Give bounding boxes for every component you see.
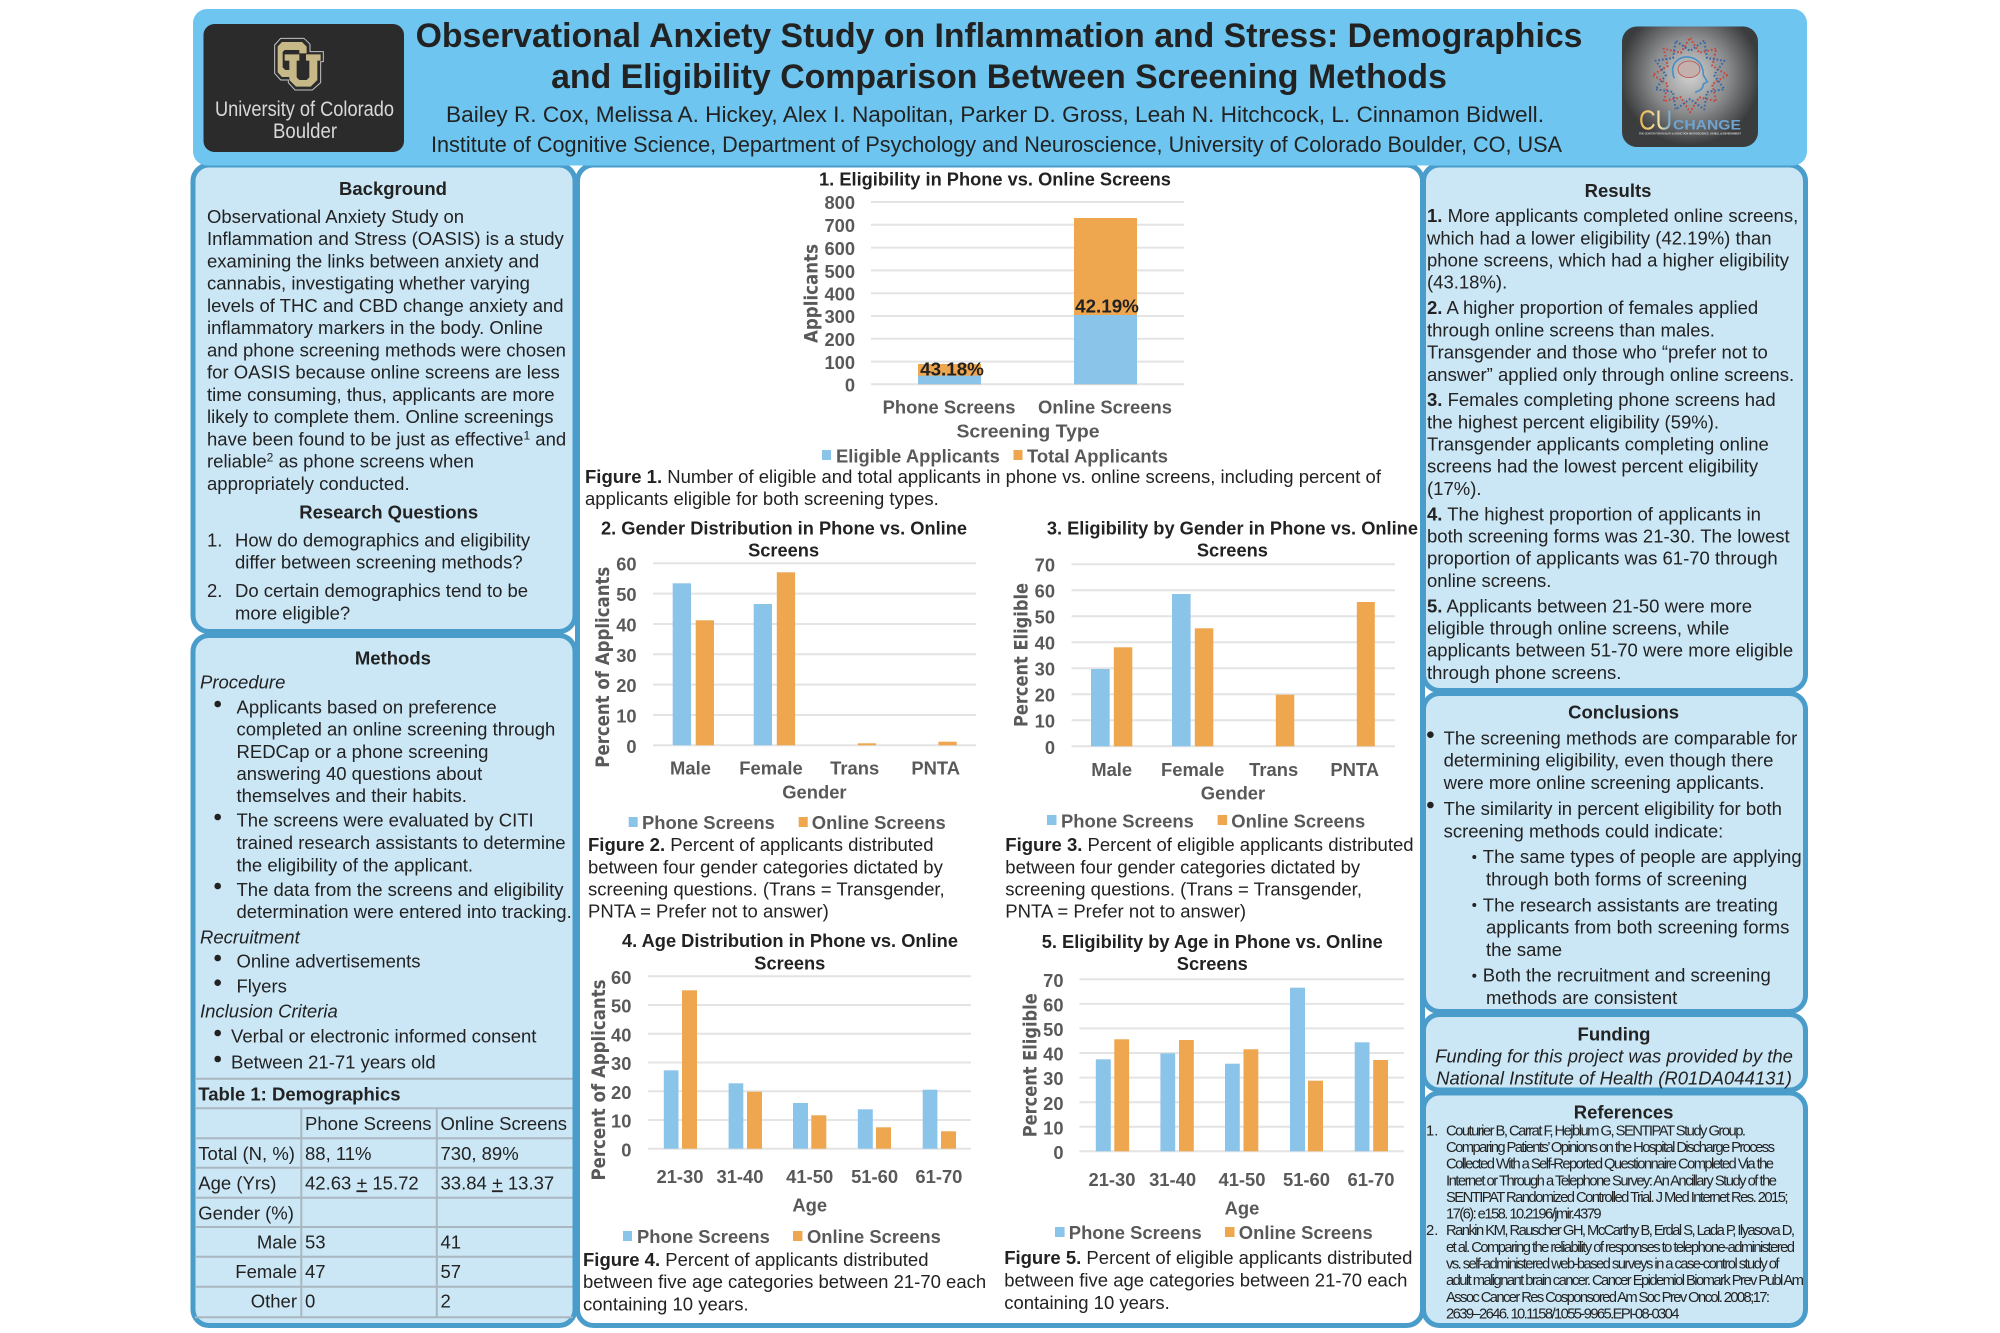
- table: demographics: 41: [440, 1232, 461, 1253]
- chart: figure 1 eligibility stacked bars: 600: [824, 238, 855, 259]
- text block: results: A higher proportion of females applied: [1442, 297, 1758, 318]
- text block: background: reliable: [207, 451, 474, 472]
- chart: figure 3 eligibility by gender: 40: [1035, 632, 1055, 654]
- chart: figure 3 eligibility by gender: 70: [1035, 554, 1055, 576]
- text block: results: (43.18%).: [1427, 272, 1507, 293]
- chart: figure 1 eligibility stacked bars: 400: [824, 284, 855, 304]
- chart: figure 1 eligibility stacked bars: Eligible Applicants: [836, 446, 1000, 466]
- logo: University of Colorado Boulder: University of Colorado: [215, 97, 394, 121]
- chart: figure 1 eligibility stacked bars: 42.19%: [1075, 296, 1139, 316]
- chart: figure 3 eligibility by gender: 60: [1035, 580, 1055, 602]
- table: demographics: Total (N, %): [198, 1143, 295, 1164]
- text block: results: Transgender applicants completing online: [1427, 433, 1769, 454]
- table: demographics: Phone Screens: [305, 1113, 432, 1134]
- chart: figure 1 eligibility stacked bars: 700: [824, 215, 855, 236]
- table: demographics: Other: [251, 1291, 297, 1312]
- list: references: Rankin KM, Rauscher GH, McCarthy B, Erdal S, Lada P, Ilyasova D,: [1446, 1223, 1795, 1239]
- caption: figure 5: between five age categories between 21-70 each: [1004, 1270, 1407, 1291]
- list: references: 1.: [1426, 1123, 1438, 1139]
- list: conclusions: The screening methods are comparable for: [1444, 727, 1797, 748]
- chart: figure 5 eligibility by age: 10: [1043, 1118, 1064, 1138]
- list: conclusions: applicants from both screening forms: [1486, 917, 1789, 938]
- logo: CU Change: THE CENTER FOR HEALTH & ADDICTION NEUROSCIENCE, GENES, & ENVIRONMENT: [1639, 132, 1741, 136]
- text block: results: Applicants between 21-50 were more: [1442, 595, 1752, 616]
- chart: figure 3 eligibility by gender: 50: [1035, 606, 1055, 628]
- caption: figure 3: between four gender categories dictated by: [1005, 856, 1361, 877]
- table: demographics: 88, 11%: [305, 1143, 372, 1164]
- text block: results: proportion of applicants was 61-70 through: [1427, 548, 1778, 569]
- list: references: 2639–2646. 10.1158/1055-9965.EPI-08-0304: [1446, 1306, 1680, 1322]
- chart: figure 2 gender distribution: Gender: [782, 782, 847, 802]
- chart: figure 4 age distribution: 4. Age Distribution in Phone vs. Online: [622, 930, 958, 951]
- heading: funding: Funding: [1578, 1024, 1650, 1045]
- chart: figure 1 eligibility stacked bars: Total Applicants: [1027, 446, 1168, 466]
- text block: background: levels of THC and CBD change anxiety and: [207, 295, 564, 316]
- list: references: Comparing Patients’ Opinions on the Hospital Discharge Process: [1446, 1140, 1775, 1156]
- list: research questions: 1.: [207, 529, 222, 550]
- list: inclusion criteria: [214, 1026, 536, 1072]
- list: research questions: more eligible?: [235, 602, 350, 623]
- chart: figure 5 eligibility by age: 5. Eligibility by Age in Phone vs. Online: [1042, 931, 1383, 952]
- text block: results: Females completing phone screens had: [1442, 389, 1776, 410]
- chart: figure 1 eligibility stacked bars: 300: [824, 306, 855, 327]
- table: demographics: 42.63 + 15.72: [305, 1172, 419, 1193]
- text block: results: The highest proportion of applicants in: [1442, 503, 1761, 524]
- logo: CU Change: CHANGE: [1673, 116, 1741, 132]
- list: procedure: completed an online screening through: [236, 719, 555, 740]
- list: procedure: the eligibility of the applicant.: [236, 855, 473, 876]
- chart: figure 3 eligibility by gender: 3. Eligibility by Gender in Phone vs. Online: [1047, 518, 1418, 538]
- table: demographics: 0: [305, 1291, 315, 1312]
- list: conclusions: The same types of people are applying: [1483, 846, 1802, 867]
- chart: figure 4 age distribution: 41-50: [786, 1166, 833, 1187]
- heading: methods: Methods: [355, 648, 431, 668]
- caption: figure 4: between five age categories between 21-70 each: [583, 1271, 986, 1292]
- heading: research questions: Research Questions: [299, 502, 478, 522]
- chart: figure 2 gender distribution: 0: [626, 736, 637, 757]
- text block: results: (17%).: [1427, 478, 1482, 499]
- chart: figure 3 eligibility by gender: Male: [1091, 759, 1132, 780]
- list: procedure: Applicants based on preference: [236, 696, 497, 717]
- chart: figure 1 eligibility stacked bars: Online Screens: [1038, 396, 1172, 418]
- caption: figure 4: Percent of applicants distributed: [660, 1249, 929, 1270]
- list: references: [1426, 1123, 1804, 1322]
- chart: figure 3 eligibility by gender: 0: [1045, 737, 1055, 758]
- chart: figure 2 gender distribution: 60: [616, 554, 637, 574]
- title: Observational Anxiety Study on Inflammation and Stress: Demographics: [416, 17, 1582, 55]
- chart: figure 4 age distribution: Phone Screens: [637, 1226, 770, 1247]
- text block: background: 1: [523, 428, 530, 442]
- text block: results: answer” applied only through online screens.: [1427, 364, 1794, 385]
- list: references: Collected With a Self-Reported Questionnaire Completed Via the: [1446, 1157, 1774, 1173]
- panel: methods and demographics table: [193, 636, 575, 1326]
- table: demographics: Table 1: Demographics: [198, 1084, 400, 1105]
- heading: conclusions: Conclusions: [1568, 702, 1679, 723]
- list: conclusions: were more online screening applicants.: [1443, 772, 1764, 793]
- table: demographics: Age (Yrs): [198, 1172, 276, 1193]
- text block: results: which had a lower eligibility (42.19%) than: [1426, 227, 1772, 248]
- text block: background: and: [530, 428, 566, 450]
- chart: figure 4 age distribution: Percent of Applicants: [588, 980, 610, 1180]
- chart: figure 2 gender distribution: PNTA: [911, 758, 960, 778]
- chart: figure 5 eligibility by age: 20: [1043, 1093, 1064, 1114]
- chart: figure 3 eligibility by gender: Female: [1161, 759, 1224, 780]
- list: procedure: [214, 696, 572, 922]
- list: conclusions: determining eligibility, even though there: [1444, 750, 1773, 771]
- caption: figure 3: Figure 3.: [1005, 834, 1082, 855]
- table: demographics: Online Screens: [440, 1113, 567, 1134]
- chart: figure 1 eligibility stacked bars: 43.18%: [920, 358, 984, 380]
- caption: figure 3: screening questions. (Trans = Transgender,: [1005, 879, 1362, 900]
- panel: conclusions: [1424, 694, 1807, 1012]
- text block: results: eligible through online screens, while: [1427, 618, 1729, 639]
- panel: results: [1424, 165, 1806, 690]
- list: references: SENTIPAT Randomized Controlled Trial. J Med Internet Res. 2015;: [1446, 1190, 1788, 1206]
- chart: figure 4 age distribution: 40: [611, 1024, 631, 1046]
- list: procedure: trained research assistants to determine: [236, 832, 566, 853]
- list: references: adult malignant brain cancer. Cancer Epidemiol Biomark Prev Publ Am: [1446, 1273, 1804, 1289]
- text block: results: screens had the lowest percent eligibility: [1427, 456, 1759, 477]
- list: recruitment: [214, 951, 421, 996]
- text block: background: cannabis, investigating whether varying: [207, 273, 530, 294]
- chart: figure 4 age distribution: Screens: [754, 952, 825, 974]
- chart: figure 2 gender distribution: 10: [616, 706, 637, 726]
- text block: background: have been found to be just as effective: [207, 428, 566, 450]
- chart: figure 2 gender distribution: 2. Gender Distribution in Phone vs. Online: [601, 518, 967, 538]
- chart: figure 3 eligibility by gender: 30: [1035, 658, 1055, 680]
- text block: results: through online screens than males.: [1427, 319, 1715, 340]
- text block: results: through phone screens.: [1427, 662, 1621, 683]
- text block: background: as phone screens when: [273, 451, 474, 472]
- caption: figure 4: Figure 4.: [583, 1249, 660, 1270]
- chart: figure 4 age distribution: Online Screens: [807, 1226, 941, 1247]
- chart: figure 4 age distribution: 50: [611, 996, 631, 1016]
- text block: results: Transgender and those who “prefer not to: [1427, 342, 1768, 363]
- chart: figure 4 age distribution: 20: [611, 1082, 631, 1103]
- table: demographics: 53: [305, 1232, 326, 1253]
- list: conclusions: screening methods could indicate:: [1444, 820, 1723, 841]
- list: recruitment: Flyers: [236, 975, 287, 996]
- chart: figure 1 eligibility stacked bars: 500: [824, 261, 855, 282]
- caption: figure 5: Figure 5.: [1004, 1247, 1081, 1268]
- chart: figure 5 eligibility by age: 50: [1043, 1019, 1064, 1040]
- chart: figure 5 eligibility by age: Screens: [1177, 953, 1248, 974]
- text block: results: 2.: [1427, 297, 1442, 318]
- chart: figure 5 eligibility by age: 30: [1043, 1068, 1064, 1089]
- table: demographics: 730, 89%: [440, 1143, 519, 1164]
- table: demographics: 33.84 + 13.37: [440, 1172, 554, 1193]
- chart: figure 4 age distribution: Age: [792, 1194, 827, 1216]
- authors: Bailey R. Cox, Melissa A. Hickey, Alex I. Napolitan, Parker D. Gross, Leah N. Hitchcock, L. Cinnamon Bidwell.: [446, 102, 1544, 127]
- chart: figure 1 eligibility stacked bars: 200: [824, 329, 855, 350]
- chart: figure 4 age distribution: 51-60: [851, 1166, 898, 1187]
- list: references: Couturier B, Carrat F, Hejblum G, SENTIPAT Study Group.: [1446, 1123, 1746, 1139]
- chart: figure 5 eligibility by age: [1020, 931, 1404, 1243]
- subheading: inclusion criteria: Inclusion Criteria: [200, 1001, 338, 1022]
- list: procedure: determination were entered into tracking.: [236, 901, 572, 922]
- caption: figure 2: Figure 2.: [588, 834, 665, 855]
- list: references: et al. Comparing the reliability of responses to telephone-administered: [1446, 1240, 1795, 1256]
- caption: figure 1: Figure 1.: [585, 466, 662, 487]
- caption: figure 2: between four gender categories dictated by: [588, 856, 944, 877]
- caption: figure 2: Percent of applicants distributed: [665, 834, 934, 855]
- chart: figure 3 eligibility by gender: Trans: [1249, 759, 1298, 780]
- chart: figure 5 eligibility by age: Age: [1225, 1198, 1259, 1218]
- list: research questions: 2.: [207, 580, 222, 601]
- header banner: [193, 9, 1807, 166]
- chart: figure 4 age distribution: 60: [611, 967, 631, 988]
- caption: figure 1: applicants eligible for both screening types.: [585, 488, 939, 509]
- chart: figure 3 eligibility by gender: PNTA: [1330, 759, 1379, 780]
- list: references: 17(6): e158. 10.2196/jmir.4379: [1446, 1207, 1602, 1223]
- chart: figure 5 eligibility by age: Online Screens: [1239, 1222, 1373, 1243]
- chart: figure 2 gender distribution: [592, 518, 976, 833]
- chart: figure 2 gender distribution: 40: [616, 614, 637, 636]
- list: research questions: Do certain demographics tend to be: [235, 580, 528, 601]
- chart: figure 5 eligibility by age: 70: [1043, 970, 1064, 991]
- list: references: Internet or Through a Telephone Survey: An Ancillary Study of the: [1446, 1173, 1777, 1189]
- chart: figure 5 eligibility by age: 51-60: [1283, 1169, 1330, 1190]
- chart: figure 2 gender distribution: Female: [739, 758, 803, 778]
- chart: figure 2 gender distribution: Screens: [748, 540, 819, 560]
- subheading: procedure: Procedure: [200, 672, 285, 693]
- text block: results: 1.: [1427, 205, 1442, 226]
- chart: figure 3 eligibility by gender: 10: [1035, 710, 1055, 732]
- chart: figure 2 gender distribution: Phone Screens: [642, 812, 775, 833]
- list: procedure: The screens were evaluated by CITI: [236, 810, 534, 831]
- chart: figure 4 age distribution: 0: [621, 1140, 631, 1160]
- chart: figure 5 eligibility by age: 40: [1043, 1044, 1064, 1064]
- icon: CU interlock: [275, 38, 323, 90]
- chart: figure 4 age distribution: 31-40: [716, 1166, 764, 1187]
- text block: results: both screening forms was 21-30. The lowest: [1427, 526, 1790, 547]
- text block: background: and phone screening methods were chosen: [207, 340, 566, 360]
- text block: background: Inflammation and Stress (OASIS) is a study: [207, 228, 565, 249]
- chart: figure 1 eligibility stacked bars: Applicants: [800, 244, 822, 343]
- panel: funding: [1424, 1014, 1806, 1090]
- list: research questions: differ between screening methods?: [235, 552, 523, 573]
- list: conclusions: The research assistants are treating: [1483, 894, 1778, 915]
- chart: figure 4 age distribution: 30: [611, 1053, 631, 1074]
- text block: results: 3.: [1427, 389, 1442, 410]
- table: demographics: Gender (%): [198, 1202, 294, 1223]
- chart: figure 3 eligibility by gender: 20: [1035, 684, 1055, 706]
- list: inclusion criteria: Between 21-71 years old: [231, 1051, 436, 1072]
- chart: figure 3 eligibility by gender: Gender: [1201, 782, 1265, 804]
- caption: figure 3: Percent of eligible applicants distributed: [1082, 834, 1414, 855]
- list: research questions: How do demographics and eligibility: [235, 529, 531, 550]
- title: and Eligibility Comparison Between Screening Methods: [551, 58, 1447, 96]
- chart: figure 2 gender distribution: Online Screens: [812, 812, 946, 833]
- list: recruitment: Online advertisements: [236, 951, 421, 972]
- text block: results: 5.: [1427, 595, 1442, 616]
- list: conclusions: Both the recruitment and screening: [1483, 965, 1771, 986]
- list: procedure: The data from the screens and eligibility: [236, 879, 564, 900]
- table: demographics: 2: [440, 1291, 451, 1312]
- list: conclusions: through both forms of screening: [1486, 868, 1747, 889]
- text block: background: inflammatory markers in the body. Online: [207, 317, 543, 338]
- text block: funding: National Institute of Health (R01DA044131): [1436, 1067, 1792, 1088]
- list: conclusions: the same: [1486, 939, 1562, 960]
- list: conclusions: methods are consistent: [1486, 987, 1677, 1008]
- panel: references: [1424, 1093, 1806, 1326]
- text block: background: time consuming, thus, applicants are more: [207, 384, 555, 405]
- chart: figure 3 eligibility by gender: Phone Screens: [1061, 810, 1194, 832]
- table: demographics: 57: [440, 1261, 461, 1282]
- chart: figure 5 eligibility by age: 0: [1053, 1142, 1064, 1163]
- chart: figure 4 age distribution: 10: [611, 1110, 631, 1132]
- text block: background: examining the links between anxiety and: [207, 250, 539, 272]
- chart: figure 1 eligibility stacked bars: Phone Screens: [883, 396, 1015, 418]
- text block: background: for OASIS because online screens are less: [207, 362, 560, 383]
- chart: figure 1 eligibility stacked bars: Screening Type: [956, 420, 1100, 442]
- chart: figure 3 eligibility by gender: Screens: [1197, 540, 1268, 560]
- chart: figure 5 eligibility by age: 61-70: [1347, 1169, 1395, 1190]
- text block: results: phone screens, which had a higher eligibility: [1427, 249, 1790, 270]
- heading: references: References: [1574, 1102, 1673, 1123]
- chart: figure 5 eligibility by age: 31-40: [1149, 1169, 1196, 1190]
- chart: figure 2 gender distribution: Male: [670, 758, 711, 778]
- logo: University of Colorado Boulder: Boulder: [273, 119, 337, 143]
- list: references: Assoc Cancer Res Cosponsored Am Soc Prev Oncol. 2008;17:: [1446, 1290, 1770, 1306]
- list: conclusions: The similarity in percent eligibility for both: [1444, 798, 1782, 819]
- chart: figure 2 gender distribution: Percent of Applicants: [592, 567, 614, 768]
- chart: figure 5 eligibility by age: 21-30: [1088, 1169, 1136, 1190]
- chart: figure 1 eligibility stacked bars: [800, 168, 1184, 466]
- text block: funding: Funding for this project was provided by the: [1435, 1045, 1793, 1066]
- list: procedure: answering 40 questions about: [236, 763, 482, 784]
- heading: results: Results: [1585, 180, 1651, 201]
- text block: background: appropriately conducted.: [207, 473, 410, 494]
- caption: figure 3: PNTA = Prefer not to answer): [1005, 901, 1246, 922]
- chart: figure 2 gender distribution: Trans: [830, 758, 879, 778]
- chart: figure 2 gender distribution: 50: [616, 584, 637, 605]
- list: inclusion criteria: Verbal or electronic informed consent: [231, 1026, 536, 1047]
- caption: figure 2: PNTA = Prefer not to answer): [588, 901, 829, 922]
- chart: figure 1 eligibility stacked bars: 800: [824, 192, 855, 213]
- panel: figures (white centre column): [578, 165, 1422, 1326]
- chart: figure 3 eligibility by gender: Percent Eligible: [1010, 583, 1032, 727]
- chart: figure 5 eligibility by age: 60: [1043, 994, 1064, 1016]
- chart: figure 3 eligibility by gender: [1010, 518, 1418, 832]
- panel: background and research questions: [193, 165, 575, 632]
- list: references: vs. self-administered web-based surveys in a case-control study of: [1446, 1256, 1780, 1272]
- logo: University of Colorado Boulder: [204, 24, 404, 152]
- table: demographics: Male: [257, 1232, 297, 1253]
- chart: figure 4 age distribution: 61-70: [915, 1166, 962, 1187]
- table: demographics: Female: [235, 1261, 297, 1282]
- chart: figure 5 eligibility by age: Phone Screens: [1069, 1222, 1202, 1243]
- list: procedure: themselves and their habits.: [236, 785, 467, 806]
- caption: figure 2: screening questions. (Trans = Transgender,: [588, 879, 945, 900]
- chart: figure 4 age distribution: 21-30: [656, 1166, 704, 1187]
- text block: results: applicants between 51-70 were more eligible: [1427, 640, 1793, 661]
- subheading: recruitment: Recruitment: [200, 926, 301, 947]
- chart: figure 1 eligibility stacked bars: 0: [845, 374, 855, 396]
- text block: background: Observational Anxiety Study on: [207, 206, 464, 227]
- text block: results: online screens.: [1427, 570, 1551, 591]
- logo: CU Change: [1622, 26, 1758, 147]
- chart: figure 1 eligibility stacked bars: 100: [824, 352, 855, 373]
- text block: results: More applicants completed online screens,: [1442, 205, 1798, 226]
- chart: figure 5 eligibility by age: Percent Eligible: [1020, 993, 1042, 1137]
- table: demographics: 47: [305, 1261, 326, 1282]
- list: conclusions: [1427, 727, 1807, 1008]
- chart: figure 2 gender distribution: 30: [616, 645, 637, 666]
- text block: results: the highest percent eligibility (59%).: [1427, 411, 1719, 432]
- caption: figure 5: Percent of eligible applicants distributed: [1081, 1247, 1412, 1268]
- text block: background: 2: [267, 451, 274, 465]
- chart: figure 5 eligibility by age: 41-50: [1218, 1169, 1266, 1190]
- chart: figure 3 eligibility by gender: Online Screens: [1231, 810, 1365, 832]
- text block: background: likely to complete them. Online screenings: [207, 406, 554, 427]
- affiliation: Institute of Cognitive Science, Department of Psychology and Neuroscience, University of Colorado Boulder, CO, USA: [431, 132, 1562, 157]
- chart: figure 1 eligibility stacked bars: 1. Eligibility in Phone vs. Online Screens: [819, 168, 1171, 190]
- text block: results: 4.: [1427, 503, 1442, 524]
- caption: figure 4: containing 10 years.: [583, 1294, 749, 1314]
- logo: CU Change: CU: [1639, 104, 1672, 135]
- chart: figure 4 age distribution: [588, 930, 971, 1247]
- list: references: 2.: [1426, 1223, 1438, 1239]
- chart: figure 2 gender distribution: 20: [616, 675, 637, 696]
- table: demographics: [195, 1079, 572, 1317]
- caption: figure 5: containing 10 years.: [1004, 1292, 1170, 1313]
- caption: figure 1: Number of eligible and total applicants in phone vs. online screens, including percent of: [662, 466, 1382, 487]
- heading: background: Background: [339, 178, 447, 199]
- list: procedure: REDCap or a phone screening: [236, 741, 488, 762]
